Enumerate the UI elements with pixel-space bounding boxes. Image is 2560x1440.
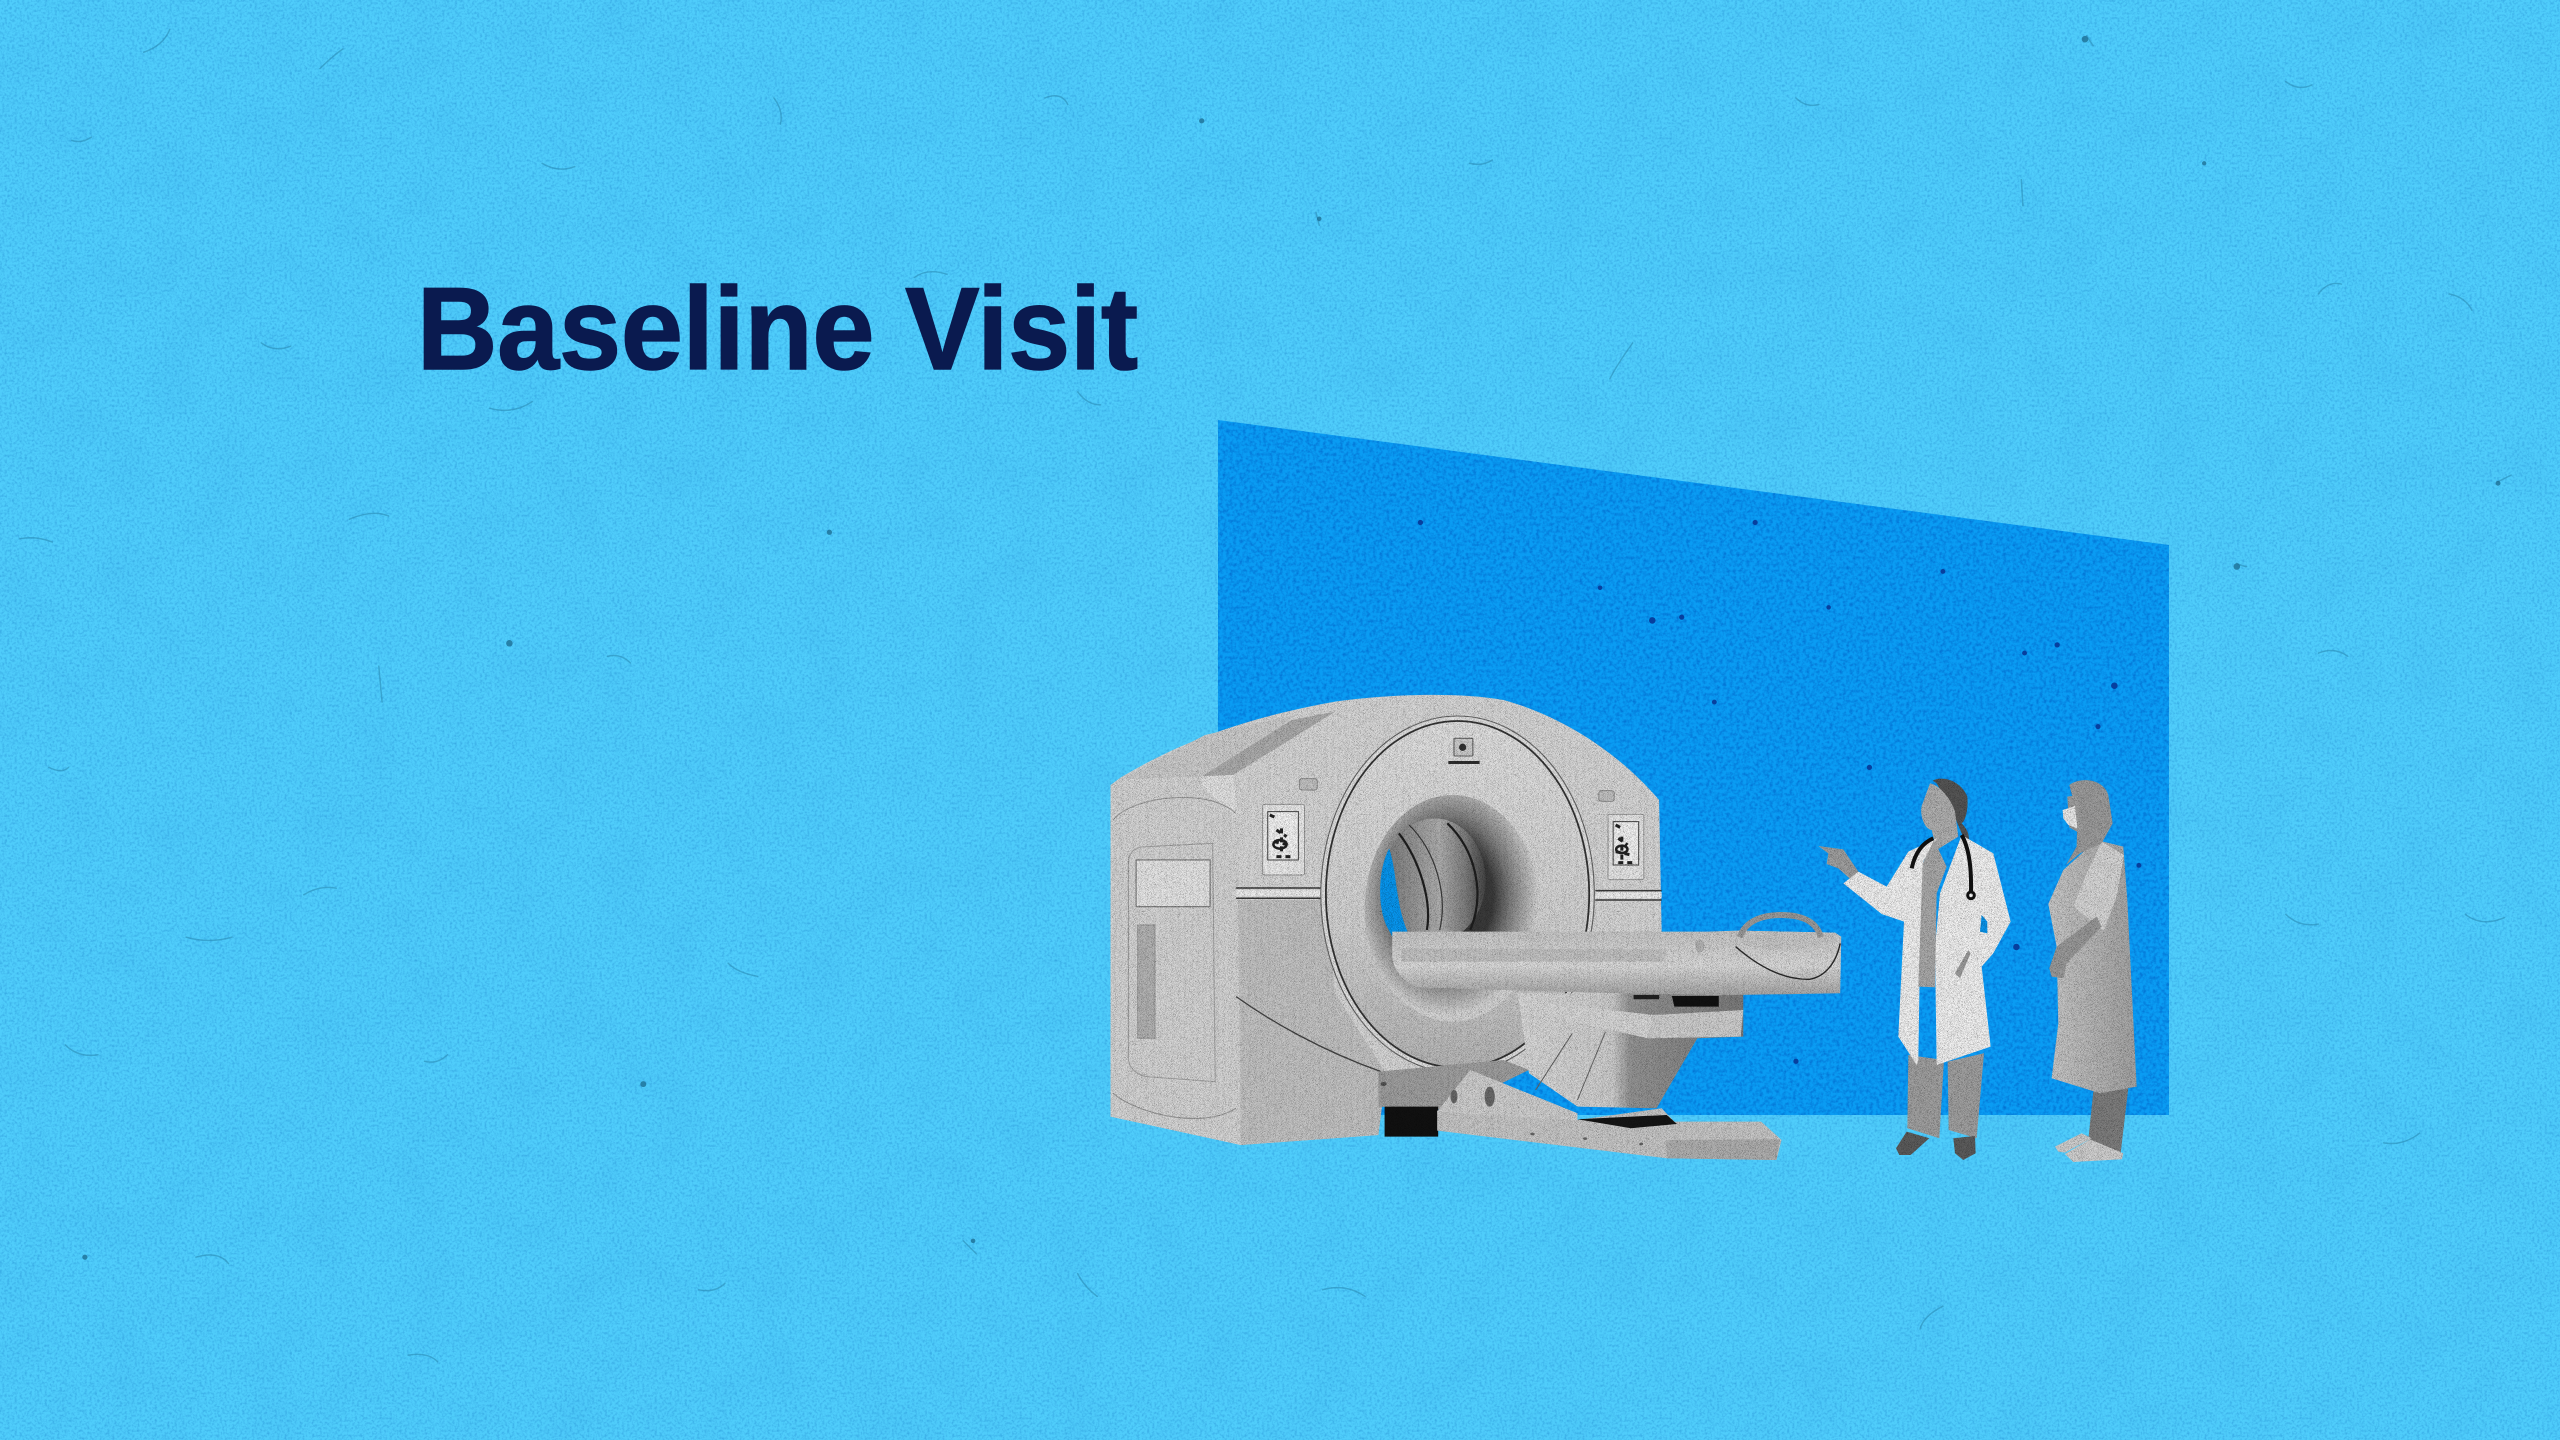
patient gown	[2048, 840, 2137, 1093]
bore opening showing blue	[1380, 848, 1408, 937]
bore tunnel	[1384, 818, 1486, 942]
lower base and dark recess	[1378, 1060, 1529, 1137]
patient hands	[2049, 917, 2102, 978]
gantry ring	[1321, 716, 1594, 1073]
illustration: doctor	[1818, 779, 2011, 1160]
illustration: patient	[2048, 780, 2137, 1162]
patient legs	[2088, 1088, 2128, 1153]
patient table	[1392, 931, 1841, 995]
table support wedge	[1634, 995, 1719, 1007]
patient sleeve	[2073, 842, 2124, 931]
doctor hair	[1933, 779, 1969, 843]
label sticker right	[1608, 814, 1644, 880]
illustration: PET/CT scanner machine	[1111, 695, 1841, 1160]
horizontal grooves	[1236, 888, 1662, 900]
patient face	[2067, 795, 2080, 833]
doctor shoes	[1896, 1132, 1976, 1160]
base plate	[1437, 1108, 1782, 1160]
title: Baseline Visit	[417, 263, 1138, 394]
doctor face and neck	[1921, 783, 1958, 850]
doctor scrub top	[1918, 840, 1947, 987]
buttons	[1299, 779, 1614, 801]
doctor hand	[1818, 846, 1858, 879]
label sticker left	[1263, 804, 1304, 875]
top camera	[1448, 738, 1479, 764]
patient mask	[2063, 806, 2077, 828]
patient slippers	[2055, 1133, 2123, 1162]
ring shading around bore	[1365, 795, 1540, 1022]
panel: darker blue backdrop	[1218, 420, 2169, 1115]
left side panel with recesses	[1111, 775, 1241, 1145]
stethoscope	[1912, 835, 1974, 899]
doctor trousers	[1907, 1053, 1984, 1138]
table column	[1518, 993, 1743, 1108]
roof stripes	[1120, 712, 1335, 779]
front face lower shade	[1238, 900, 1386, 1145]
doctor lab coat	[1843, 835, 2011, 1065]
patient hair	[2066, 780, 2113, 865]
table handle	[1740, 915, 1821, 937]
scanner body	[1111, 695, 1662, 1145]
